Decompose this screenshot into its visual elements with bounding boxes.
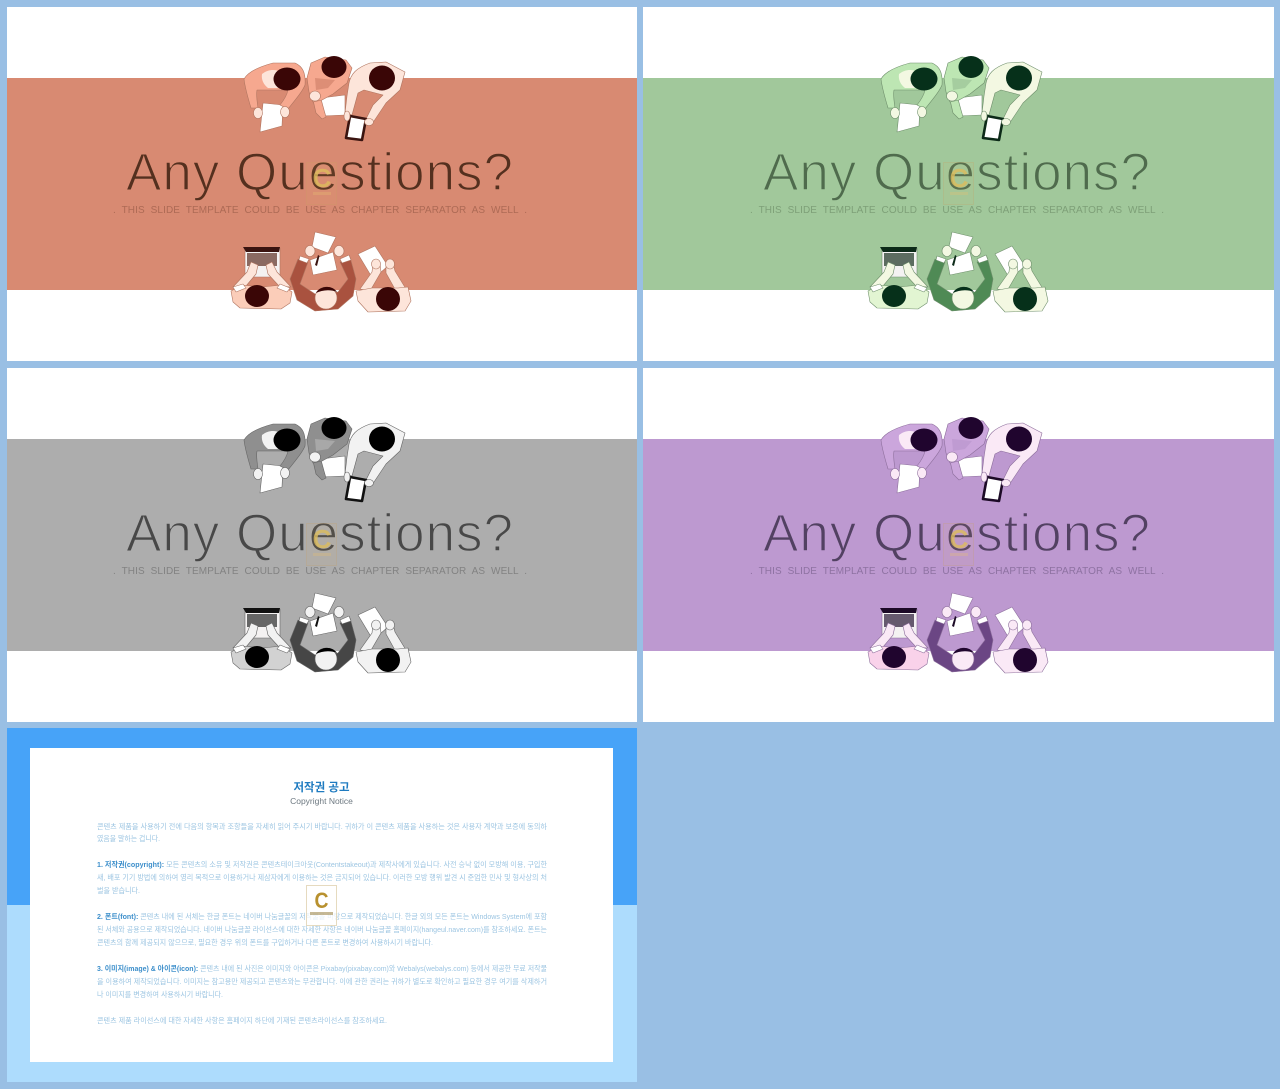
band bbox=[7, 439, 637, 651]
title: Any Questions? bbox=[763, 143, 1150, 202]
notice body text: 였음을 말하는 겁니다. bbox=[97, 834, 160, 843]
notice body text: 콘텐츠의 함께 제공되지 않으므로, 필요한 경우 위의 폰트를 구입하거나 다른 폰트로 변경하여 사용하시기 바랍니다. bbox=[97, 938, 433, 947]
notice body text: 콘텐츠 제품을 사용하기 전에 다음의 항목과 조항들을 자세히 읽어 주시기 바랍니다. 귀하가 이 콘텐츠 제품을 사용하는 것은 사용자 계약과 보증에 동의하 bbox=[97, 822, 547, 831]
notice body text: 새, 배포 기기 방법에 의하여 영리 목적으로 이용하거나 제삼자에게 이용하는 것은 금지되어 있습니다. 이러한 모방 행위 발견 시 준엄한 민사 및 형사상의 처 bbox=[97, 873, 547, 882]
notice body text: 된 서체와 공용으로 제작되었습니다. 네이버 나눔글꼴 라이선스에 대한 자세한 사항은 네이버 나눔글꼴 홈페이지(hangeul.naver.com)를 참조하세요. 폰트는 bbox=[97, 925, 547, 934]
illustration: three people seated at bottom bbox=[231, 232, 411, 312]
notice body text: 벌을 받습니다. bbox=[97, 886, 140, 895]
band bbox=[643, 78, 1274, 290]
watermark logo bbox=[944, 162, 974, 204]
panel: gray slide bbox=[7, 368, 637, 722]
notice body text: 나 이미지를 변경하여 사용하시기 바랍니다. bbox=[97, 990, 223, 999]
watermark logo bbox=[306, 886, 336, 926]
watermark logo: C bbox=[314, 888, 329, 913]
subtitle: . THIS SLIDE TEMPLATE COULD BE USE AS CHAPTER SEPARATOR AS WELL . bbox=[113, 205, 527, 216]
notice body text: 콘텐츠 제품 라이선스에 대한 자세한 사항은 홈페이지 하단에 기재된 콘텐츠라이선스를 참조하세요. bbox=[97, 1016, 387, 1025]
illustration: three people seated at bottom bbox=[231, 593, 411, 673]
notice heading: 저작권 공고 bbox=[293, 780, 350, 794]
watermark logo bbox=[306, 162, 336, 204]
illustration: three people seated at top bbox=[244, 417, 405, 501]
title: Any Questions? bbox=[126, 143, 513, 202]
notice body text: 3. 이미지(image) & 아이콘(icon): 콘텐츠 내에 된 사진은 이미지와 아이콘은 Pixabay(pixabay.com)와 Webalys(webalys.com) 등에서 제공한 무료 저작물 bbox=[97, 964, 547, 973]
notice body text: 2. 폰트(font): 콘텐츠 내에 된 서체는 한글 폰트는 네이버 나눔글꼴의 저작물을 바탕으로 제작되었습니다. 한글 외의 모든 폰트는 Windows System에 포함 bbox=[97, 912, 547, 921]
white card bbox=[30, 748, 613, 1062]
notice body text: 1. 저작권(copyright): 모든 콘텐츠의 소유 및 저작권은 콘텐츠테이크아웃(Contentstakeout)과 제작사에게 있습니다. 사전 승낙 없이 모방해 이용, 구입한 bbox=[97, 860, 547, 869]
band bbox=[643, 439, 1274, 651]
notice body text: 을 이용하여 제작되었습니다. 이미지는 참고용만 제공되고 콘텐츠와는 무관합니다. 이에 관한 권리는 귀하가 별도로 확인하고 필요한 경우 여기를 삭제하거 bbox=[97, 977, 547, 986]
notice body text bbox=[97, 822, 547, 1025]
subtitle: . THIS SLIDE TEMPLATE COULD BE USE AS CHAPTER SEPARATOR AS WELL . bbox=[750, 566, 1164, 577]
panel: copyright notice bbox=[7, 728, 637, 1082]
notice subheading: Copyright Notice bbox=[290, 796, 353, 806]
subtitle: . THIS SLIDE TEMPLATE COULD BE USE AS CHAPTER SEPARATOR AS WELL . bbox=[113, 566, 527, 577]
illustration: three people seated at top bbox=[881, 417, 1042, 501]
illustration: three people seated at top bbox=[881, 56, 1042, 140]
band bbox=[7, 78, 637, 290]
illustration: three people seated at top bbox=[244, 56, 405, 140]
panel: purple slide bbox=[643, 368, 1274, 722]
title: Any Questions? bbox=[763, 504, 1150, 563]
watermark logo bbox=[306, 524, 336, 566]
subtitle: . THIS SLIDE TEMPLATE COULD BE USE AS CHAPTER SEPARATOR AS WELL . bbox=[750, 205, 1164, 216]
watermark logo bbox=[944, 524, 974, 566]
illustration: three people seated at bottom bbox=[868, 593, 1048, 673]
panel: coral slide bbox=[7, 7, 637, 361]
title: Any Questions? bbox=[126, 504, 513, 563]
panel: green slide bbox=[643, 7, 1274, 361]
illustration: three people seated at bottom bbox=[868, 232, 1048, 312]
